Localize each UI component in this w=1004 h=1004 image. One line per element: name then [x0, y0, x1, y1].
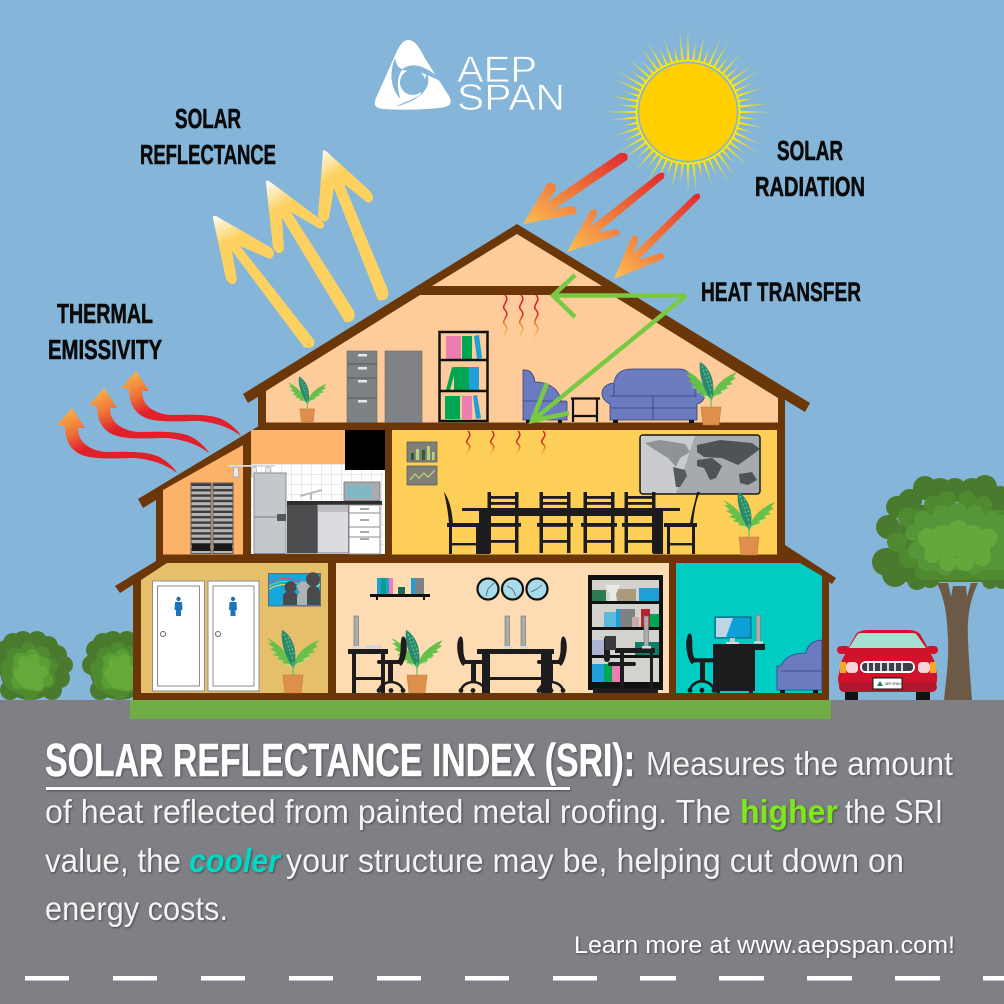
office chair 2: [457, 637, 487, 693]
foliage: [872, 475, 1004, 590]
green arrow: heat transfer to attic: [553, 275, 686, 317]
side chair left: [444, 492, 480, 554]
SRI definition text: [45, 734, 955, 959]
heat waves: top floor: [504, 295, 538, 340]
windshield: [849, 633, 926, 648]
grey door: [385, 351, 422, 422]
office bookcase: [588, 575, 663, 693]
office wall: [336, 563, 669, 693]
plant: restroom: [267, 630, 319, 693]
icon: person: [229, 597, 237, 616]
sofa: [602, 369, 705, 423]
dining table and chairs: [444, 492, 700, 554]
plant: top floor right: [685, 362, 737, 425]
label: solar radiation: [755, 135, 865, 202]
server room wall: [163, 445, 243, 554]
filing cabinet: [347, 351, 377, 422]
chairs: [485, 492, 658, 553]
body text: higher: [740, 793, 838, 830]
office shelf: [370, 578, 430, 600]
logo wordmark: [457, 49, 565, 118]
side chair right: [664, 492, 700, 554]
label: thermal emissivity: EMISSIVITY: [48, 334, 162, 365]
body text: energy costs.: [45, 890, 228, 927]
table: [462, 508, 680, 554]
wheels: [845, 690, 858, 700]
body text: cooler: [189, 842, 282, 879]
tree: [872, 475, 1004, 700]
plant: top floor left: [288, 376, 327, 422]
teal room desk: [713, 615, 765, 693]
monitors: [503, 616, 528, 648]
heading underline: [46, 787, 570, 790]
desk 1: [348, 616, 388, 693]
door: right: [208, 581, 259, 691]
desk 2: [477, 616, 554, 693]
roof ridge triangle: [432, 234, 602, 286]
arrows: thermal emissivity: [57, 371, 241, 473]
drawers: [349, 505, 380, 554]
plant: office: [391, 630, 443, 693]
dining room wall: [392, 430, 777, 554]
license plate: AEP SPAN: [885, 682, 901, 686]
teal room chair: [686, 634, 716, 693]
bush right: [82, 631, 163, 700]
kitchen black panel: [345, 430, 385, 470]
teal room armchair: [777, 640, 822, 693]
fridge: [254, 473, 286, 554]
car: [837, 630, 938, 700]
body text: value, the: [45, 842, 181, 879]
label: solar reflectance: [140, 103, 276, 170]
headlights: [840, 662, 936, 673]
logo: AEP SPAN: [375, 40, 565, 118]
road dashes: [25, 976, 1004, 980]
kitchen wall: [251, 430, 385, 464]
label: thermal emissivity: [48, 298, 162, 365]
office chair 1: [377, 637, 407, 693]
desk in bookcase: [593, 636, 658, 693]
call to action: Learn more at www.aepspan.com!: [574, 932, 955, 959]
green arrow: heat transfer to second floor: [532, 296, 686, 421]
office chair 3: [537, 637, 567, 693]
microwave: [344, 482, 380, 500]
mirrors: [837, 646, 850, 654]
track light: [228, 465, 275, 477]
counter: [287, 501, 382, 505]
teal room wall: [676, 563, 822, 693]
label: thermal emissivity: THERMAL: [57, 298, 153, 329]
kitchen: [228, 465, 382, 554]
restroom wall: [141, 563, 328, 693]
trunk: [937, 583, 978, 700]
car body: [838, 630, 937, 692]
body text: your structure may be, helping cut down on: [286, 842, 904, 879]
body text: of heat reflected from painted metal roofing. The: [45, 793, 731, 830]
framed picture: [268, 572, 320, 606]
side table: [571, 398, 600, 422]
faucet: [300, 490, 322, 500]
label: solar reflectance: REFLECTANCE: [140, 139, 276, 170]
monitor: [352, 616, 361, 648]
dishwasher: [318, 505, 348, 553]
body text: [45, 745, 953, 927]
bookshelf: [439, 332, 488, 421]
top floor room: [266, 295, 778, 422]
sun rays: [594, 18, 782, 206]
sun: [594, 18, 782, 206]
door: left: [152, 581, 204, 691]
label: solar radiation: SOLAR: [777, 135, 843, 166]
grass: [130, 700, 831, 719]
world map: [640, 435, 760, 494]
heat waves: second floor: [467, 431, 545, 457]
restroom doors: [152, 581, 259, 691]
road: [0, 700, 1004, 1004]
body text: Measures the amount: [646, 745, 953, 782]
arrows: solar reflectance: [213, 150, 388, 348]
computer monitor: [715, 617, 751, 644]
server racks: [191, 483, 233, 554]
label: heat transfer: HEAT TRANSFER: [701, 277, 861, 307]
icon: person: [174, 597, 182, 616]
kitchen tiles: [251, 464, 385, 554]
body text: the SRI: [845, 793, 943, 830]
lower cabinet: [287, 503, 317, 554]
house: [115, 224, 836, 700]
arrows: solar radiation: [523, 153, 700, 279]
clocks: [478, 578, 548, 600]
wall charts: [407, 442, 437, 485]
armchair: [523, 370, 567, 423]
house structure: [115, 224, 836, 700]
label: solar reflectance: SOLAR: [175, 103, 241, 134]
logo wordmark: AEP: [457, 49, 537, 90]
logo mark: [375, 40, 451, 110]
grille: [860, 661, 915, 673]
logo wordmark: SPAN: [457, 77, 565, 118]
bush left: [0, 631, 73, 700]
label: solar radiation: RADIATION: [755, 171, 865, 202]
plant: dining room: [723, 492, 775, 555]
heading: SOLAR REFLECTANCE INDEX (SRI):: [45, 734, 635, 786]
sky background: [0, 0, 1004, 700]
